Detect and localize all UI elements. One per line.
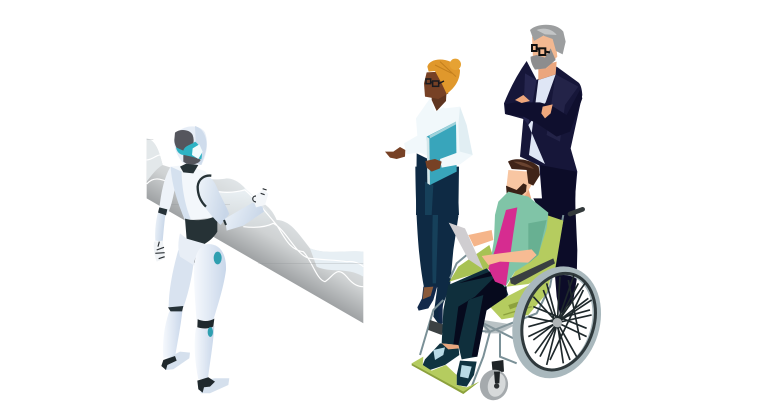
robot figure (154, 126, 268, 393)
wheel spokes (528, 275, 592, 365)
seated man's head (506, 159, 540, 212)
woman's hand on folder (425, 159, 442, 172)
robot far foot (161, 352, 190, 370)
robot waist (185, 215, 217, 244)
woman's collar (431, 98, 447, 112)
wheelchair handle (570, 209, 583, 214)
wheelchair backrest (507, 215, 563, 287)
robot knee band (197, 319, 214, 328)
woman's folder (427, 122, 457, 185)
man's hair (530, 25, 566, 54)
man's lower legs (533, 198, 577, 315)
robot near shin (195, 326, 214, 379)
seated man's face (507, 170, 532, 198)
robot near foot (197, 377, 229, 393)
robot raised hand (253, 189, 268, 207)
man's crossed arms (505, 90, 582, 137)
wheelchair seat (488, 273, 552, 319)
woman's forearm over folder (440, 152, 473, 168)
robot torso (171, 165, 217, 221)
wheelchair back frame (420, 215, 563, 387)
robot far leg (169, 250, 194, 307)
woman's glasses (426, 79, 444, 86)
seated man's far forearm (468, 230, 493, 247)
seated man's neck (512, 188, 534, 212)
standing woman's legs (415, 167, 459, 325)
robot near upper arm (199, 176, 229, 225)
woman's trousers top (416, 153, 459, 215)
seated man's legs (442, 268, 508, 359)
wave chart panel (147, 138, 363, 323)
seated man's hair (508, 159, 540, 186)
robot neck (180, 163, 198, 173)
seated man's shoes (423, 343, 477, 387)
robot helmet (174, 126, 207, 165)
man's neck (538, 62, 557, 80)
seated man's near arm (482, 249, 537, 265)
wheelchair small wheel (477, 360, 511, 403)
wheelchair cushion (449, 245, 497, 282)
tablet (449, 223, 483, 269)
robot teal dot on shin (208, 327, 213, 337)
robot forearm (225, 203, 264, 231)
man's beard (531, 48, 556, 70)
man's jacket (504, 61, 582, 215)
seated man's shirt (488, 207, 517, 286)
seated man's jacket (489, 192, 548, 287)
robot hips (178, 233, 209, 266)
man's face (532, 35, 557, 68)
standing man (504, 25, 582, 215)
woman's face (424, 72, 448, 99)
man's legs top (540, 165, 576, 215)
robot teal dot on thigh (214, 252, 222, 264)
woman's shirt (404, 98, 473, 168)
standing woman (385, 59, 473, 215)
woman's shoes (417, 286, 443, 325)
wheelchair large wheel (504, 261, 609, 384)
woman's neck (432, 88, 447, 111)
woman's outstretched hand (385, 147, 405, 159)
wheelchair footplate (412, 357, 479, 394)
man's shirt (528, 74, 556, 164)
robot scene (147, 126, 363, 393)
wheelchair armrest (510, 258, 555, 285)
robot near thigh (194, 244, 226, 321)
seated man's beard (506, 183, 527, 198)
wheelchair and seated man (412, 192, 609, 403)
woman's hair (427, 59, 461, 94)
robot back arm (159, 167, 176, 214)
robot back hand (154, 241, 165, 262)
man's glasses (532, 45, 550, 55)
